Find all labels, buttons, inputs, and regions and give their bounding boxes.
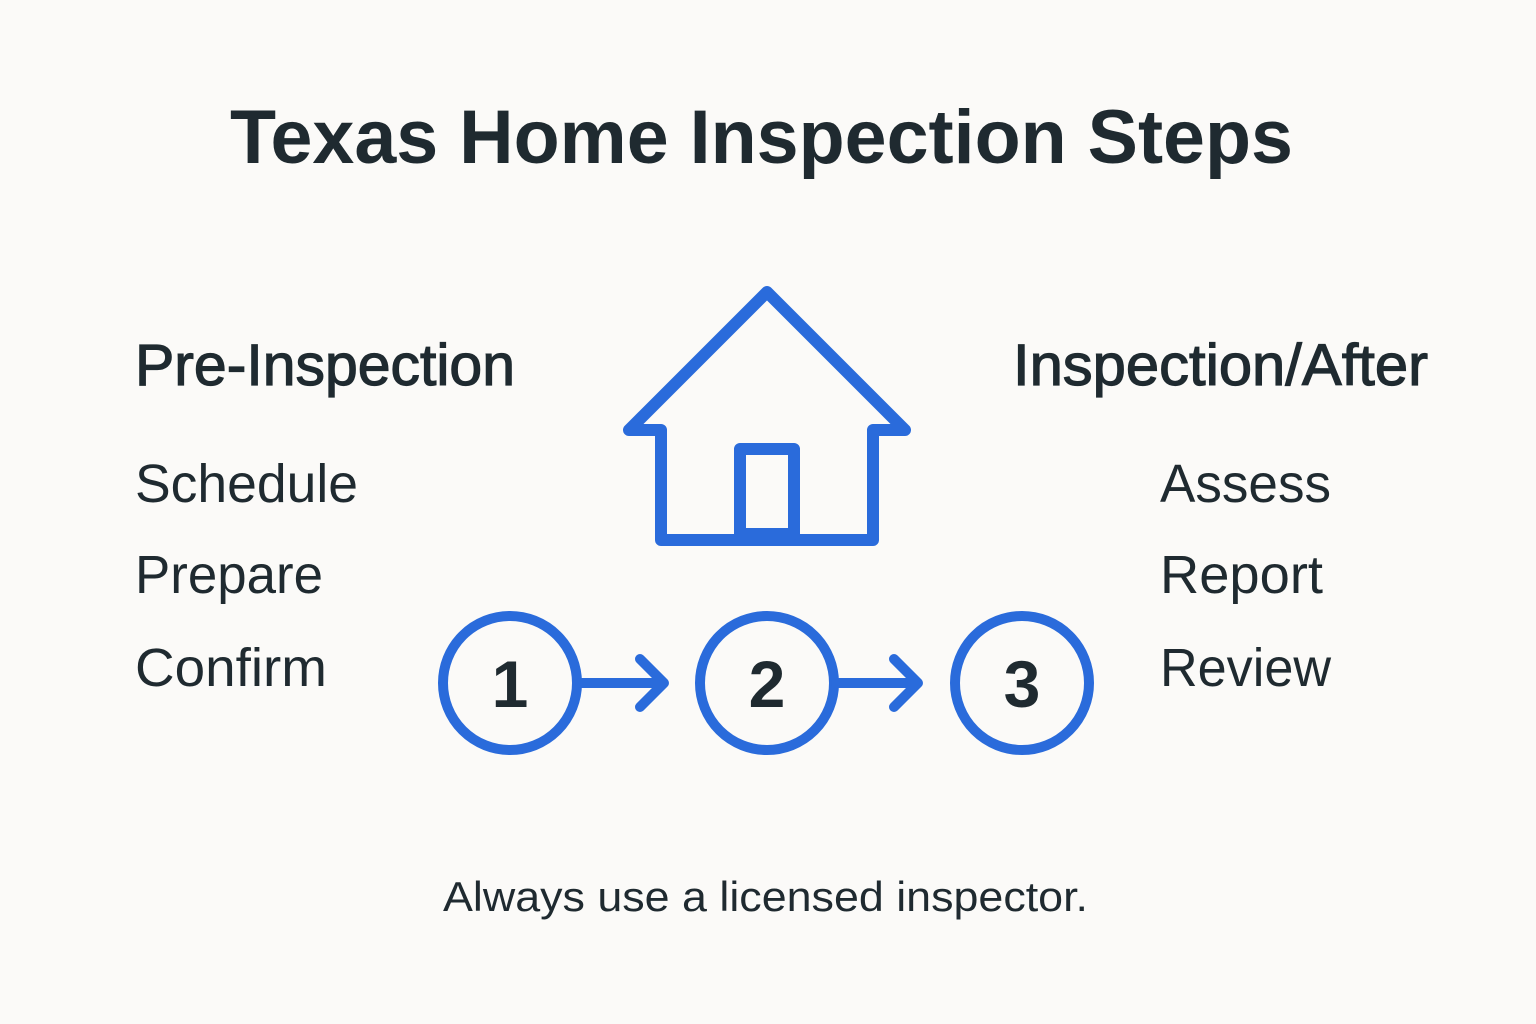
panel: inspection/after — [1013, 333, 1428, 698]
list: after steps — [1160, 454, 1332, 698]
list: pre-inspection steps: Prepare — [135, 545, 323, 605]
list: pre-inspection steps: Schedule — [135, 454, 358, 514]
icon: house — [629, 292, 905, 540]
arrow 1 to 2 — [580, 659, 664, 707]
footer note: Always use a licensed inspector. — [443, 873, 1088, 920]
arrow 2 to 3 — [836, 659, 918, 707]
heading: pre-inspection: Pre-Inspection — [135, 333, 515, 398]
heading: inspection/after: Inspection/After — [1013, 333, 1428, 398]
step 2: 2 — [749, 647, 785, 721]
step 3: 3 — [1004, 647, 1040, 721]
step 3 — [955, 616, 1089, 750]
step 1: 1 — [492, 647, 528, 721]
list: after steps: Report — [1160, 545, 1323, 605]
list: pre-inspection steps: Confirm — [135, 638, 327, 698]
step flow — [443, 616, 1089, 750]
panel: pre-inspection — [135, 333, 515, 698]
step 1 — [443, 616, 577, 750]
list: after steps: Review — [1160, 638, 1332, 698]
title: Texas Home Inspection Steps — [230, 95, 1293, 180]
list: pre-inspection steps — [135, 454, 358, 698]
list: after steps: Assess — [1160, 454, 1331, 514]
step 2 — [700, 616, 834, 750]
